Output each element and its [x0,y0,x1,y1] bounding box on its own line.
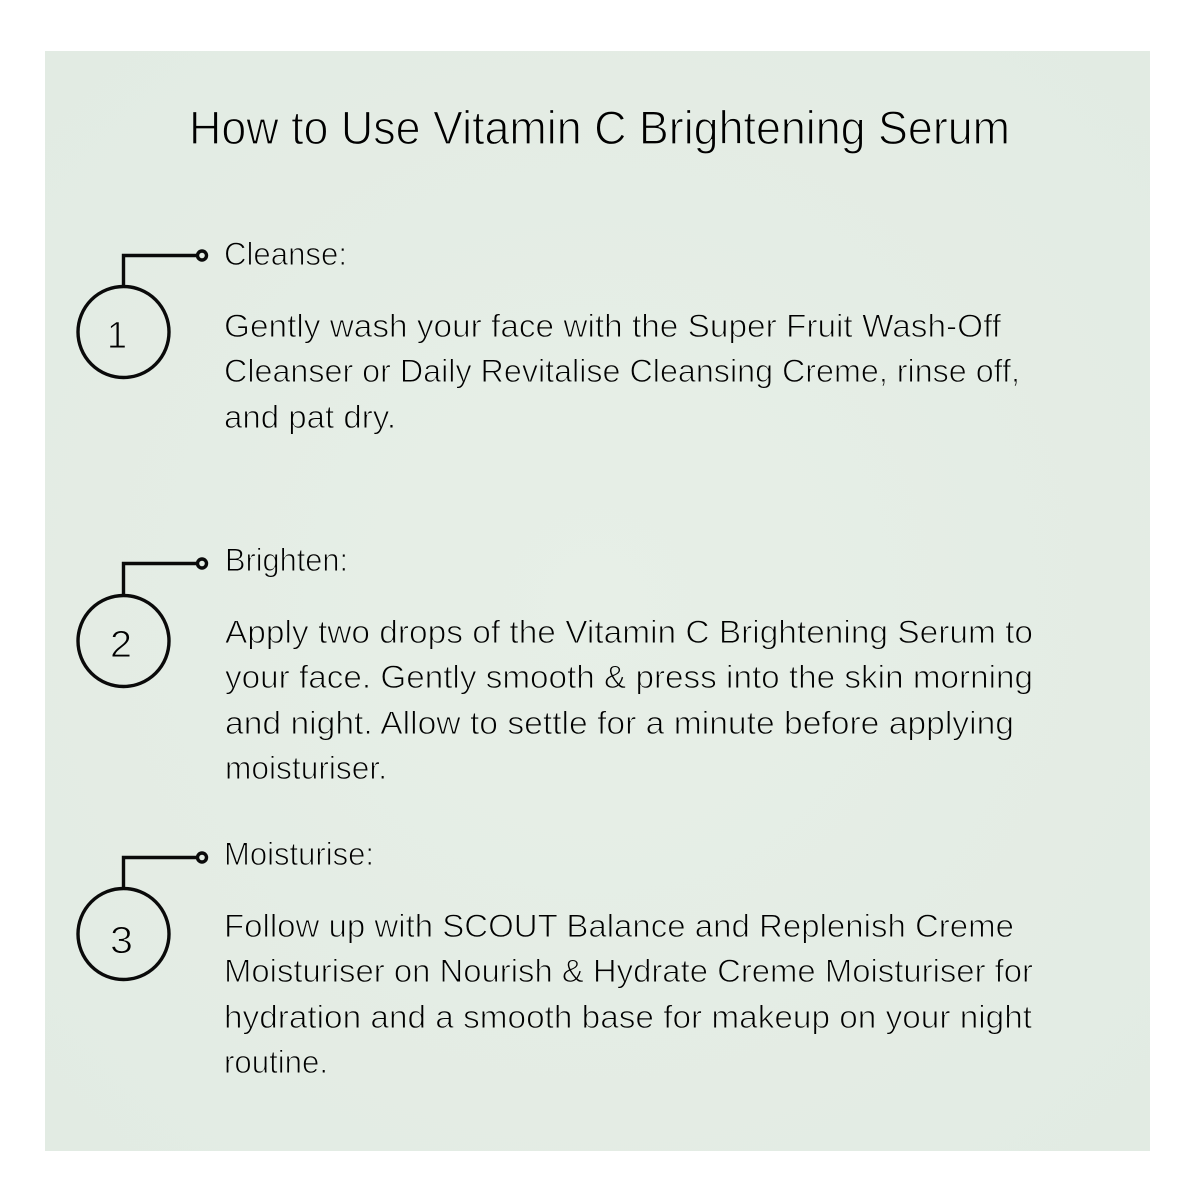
step 3 body: Moisturiser on Nourish & Hydrate Creme Moisturiser for [224,953,1033,989]
step 1 body: and pat dry. [224,399,396,435]
step 2 body: Apply two drops of the Vitamin C Brightening Serum to [225,614,1033,650]
step 1: cleanse [78,236,1020,435]
step 3: moisturise [78,836,1033,1080]
step 2 number: 2 [110,624,132,666]
step 3 body: routine. [224,1044,328,1080]
step 1 body [224,308,1020,435]
step 1 body: Gently wash your face with the Super Fruit Wash-Off [224,308,1001,344]
step 1 number: 1 [107,315,127,357]
icon: step 3 number badge and connector [78,853,206,980]
step 2 body [225,614,1033,786]
step 3 body [224,908,1033,1080]
step 3 number: 3 [110,920,133,962]
step 2 body: your face. Gently smooth & press into the skin morning [225,659,1033,695]
step 2 body: moisturiser. [225,750,387,786]
step 2 body: and night. Allow to settle for a minute before applying [225,705,1014,741]
step 2 heading: Brighten: [225,542,348,578]
step 2: brighten [78,542,1033,786]
icon: step 1 number badge and connector [78,251,206,378]
step 3 body: Follow up with SCOUT Balance and Replenish Creme [224,908,1014,944]
step 1 body: Cleanser or Daily Revitalise Cleansing Creme, rinse off, [224,353,1020,389]
title: How to Use Vitamin C Brightening Serum [189,101,1010,154]
step 3 heading: Moisturise: [224,836,374,872]
step 3 body: hydration and a smooth base for makeup on your night [224,999,1032,1035]
icon: step 2 number badge and connector [78,559,206,686]
step 1 heading: Cleanse: [224,236,347,272]
